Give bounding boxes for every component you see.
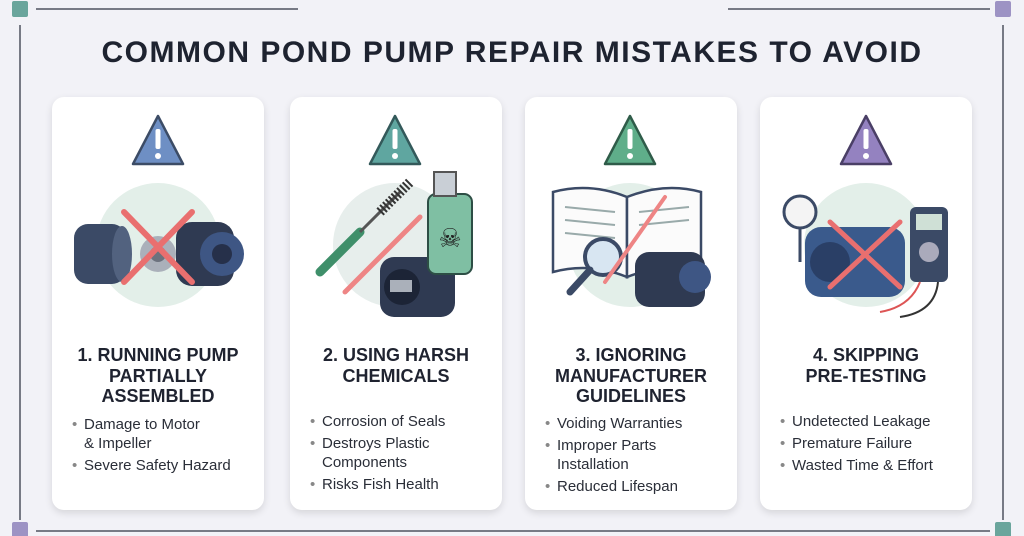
heading: PARTIALLY <box>109 366 207 386</box>
panel: ignoring manufacturer guidelines <box>525 97 737 510</box>
bullets <box>72 416 231 474</box>
bullets <box>546 415 682 495</box>
icon: illustration testing <box>782 114 948 318</box>
bullets: Damage to Motor <box>84 416 200 433</box>
bullets: Premature Failure <box>792 435 912 452</box>
bullets: & Impeller <box>84 435 152 452</box>
icon: illustration manual <box>552 114 711 307</box>
icon: illustration chemicals: ☠ <box>438 223 462 253</box>
heading: ASSEMBLED <box>101 386 214 406</box>
bullets <box>780 413 933 474</box>
icon: illustration chemicals <box>316 114 473 317</box>
heading: 1. RUNNING PUMP <box>77 345 238 365</box>
bullets: Improper Parts <box>557 437 656 454</box>
heading: PRE-TESTING <box>805 366 926 386</box>
title: COMMON POND PUMP REPAIR MISTAKES TO AVOID <box>102 36 922 69</box>
heading: CHEMICALS <box>342 366 450 386</box>
bullets: Installation <box>557 456 629 473</box>
bullets: Undetected Leakage <box>792 413 930 430</box>
bullets: Corrosion of Seals <box>322 413 445 430</box>
heading: 3. IGNORING <box>575 345 686 365</box>
bullets <box>310 413 445 493</box>
heading <box>555 345 707 406</box>
bullets: Reduced Lifespan <box>557 478 678 495</box>
panel: running pump partially assembled <box>52 97 264 510</box>
heading <box>805 345 926 386</box>
bullets: Severe Safety Hazard <box>84 457 231 474</box>
icon: illustration pump parts <box>74 114 244 307</box>
bullets: Destroys Plastic <box>322 435 430 452</box>
heading <box>77 345 238 406</box>
bullets: Components <box>322 454 407 471</box>
panel: skipping pre-testing <box>760 97 972 510</box>
heading <box>323 345 469 386</box>
bullets: Voiding Warranties <box>557 415 682 432</box>
bullets: Wasted Time & Effort <box>792 457 933 474</box>
heading: 4. SKIPPING <box>813 345 919 365</box>
heading: 2. USING HARSH <box>323 345 469 365</box>
panel: using harsh chemicals <box>290 97 502 510</box>
bullets: Risks Fish Health <box>322 476 439 493</box>
heading: GUIDELINES <box>576 386 686 406</box>
heading: MANUFACTURER <box>555 366 707 386</box>
